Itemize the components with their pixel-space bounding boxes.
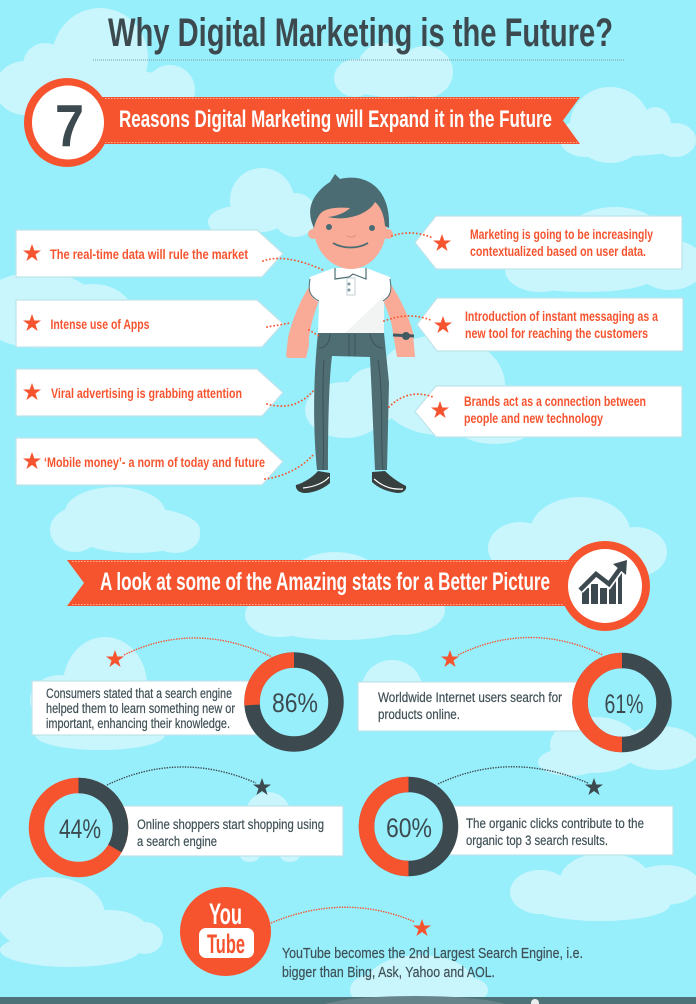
star and arc (107, 767, 271, 795)
description (466, 816, 644, 848)
trousers (314, 333, 389, 470)
text panel (32, 681, 256, 735)
donut (36, 786, 121, 870)
description (46, 686, 235, 731)
value: 61% (604, 689, 644, 719)
panel: right reason 1 (415, 216, 682, 269)
description (378, 690, 562, 722)
panel: right reason 3 (415, 386, 682, 437)
description: YouTube becomes the 2nd Largest Search Engine, i.e. (282, 945, 583, 962)
panel: left reason 1: The real-time data will rule the market (50, 247, 248, 262)
stat: 44% (36, 767, 343, 870)
panel: right reason 2 (417, 298, 683, 351)
panel: right reason 2: new tool for reaching the customers (465, 326, 648, 341)
value: 60% (386, 813, 432, 843)
star and arc (106, 638, 272, 667)
panel: left reason 4: ‘Mobile money’- a norm of today and future (44, 455, 265, 470)
section header: 7 reasons (24, 78, 580, 167)
description: Consumers stated that a search engine (46, 686, 232, 701)
stat: 61% (358, 638, 664, 744)
description: helped them to learn something new or (46, 701, 235, 716)
star and arc (271, 907, 431, 936)
description: bigger than Bing, Ask, Yahoo and AOL. (282, 964, 495, 981)
text panel (448, 806, 673, 855)
description (137, 817, 324, 849)
right arm (383, 283, 415, 357)
ribbon banner (67, 560, 590, 606)
star and arc (441, 638, 603, 667)
title underline (93, 59, 625, 61)
section header: amazing stats (67, 541, 650, 631)
dotted connectors from reasons to character (263, 233, 433, 479)
donut (366, 784, 450, 868)
description: The organic clicks contribute to the (466, 816, 644, 831)
panel: right reason 3: Brands act as a connection between (464, 394, 646, 409)
description: products online. (378, 707, 460, 722)
description: important, enhancing their knowledge. (46, 716, 230, 731)
panel: left reason 1 (16, 230, 283, 277)
shoes (296, 471, 406, 493)
watch (393, 332, 414, 340)
bottom bar (0, 996, 696, 1004)
description: Online shoppers start shopping using (137, 817, 324, 832)
ribbon banner (100, 97, 580, 144)
text panel (118, 806, 343, 856)
panel: right reason 3: people and new technology (464, 411, 603, 426)
number badge: 7 (55, 93, 84, 159)
panel: left reason 3: Viral advertising is grabbing attention (51, 386, 242, 401)
donut (580, 660, 664, 744)
panel: left reason 2 (16, 300, 283, 347)
icon: YouTube logo: Tube (207, 929, 245, 959)
stat: 86% (32, 638, 336, 744)
star and arc (438, 767, 603, 795)
stat: YouTube (180, 887, 583, 981)
value: 86% (272, 688, 318, 718)
icon: YouTube logo (180, 887, 271, 976)
panel: left reason 4 (16, 438, 283, 485)
panel: left reason 3 (16, 369, 283, 416)
stat: 60% (366, 767, 673, 868)
description: organic top 3 search results. (466, 833, 608, 848)
icon: YouTube logo: You (209, 898, 242, 931)
description: a search engine (137, 834, 217, 849)
shirt (309, 268, 391, 333)
character illustration (286, 174, 415, 493)
text panel (358, 682, 580, 731)
chart badge (560, 541, 650, 631)
description: Worldwide Internet users search for (378, 690, 562, 705)
left arm (286, 284, 319, 358)
number badge (24, 78, 110, 167)
head (308, 174, 393, 269)
panel: left reason 2: Intense use of Apps (50, 317, 150, 332)
donut (252, 660, 336, 744)
description (282, 945, 583, 981)
panel: right reason 1: contextualized based on user data. (470, 244, 646, 259)
value: 44% (59, 814, 101, 844)
